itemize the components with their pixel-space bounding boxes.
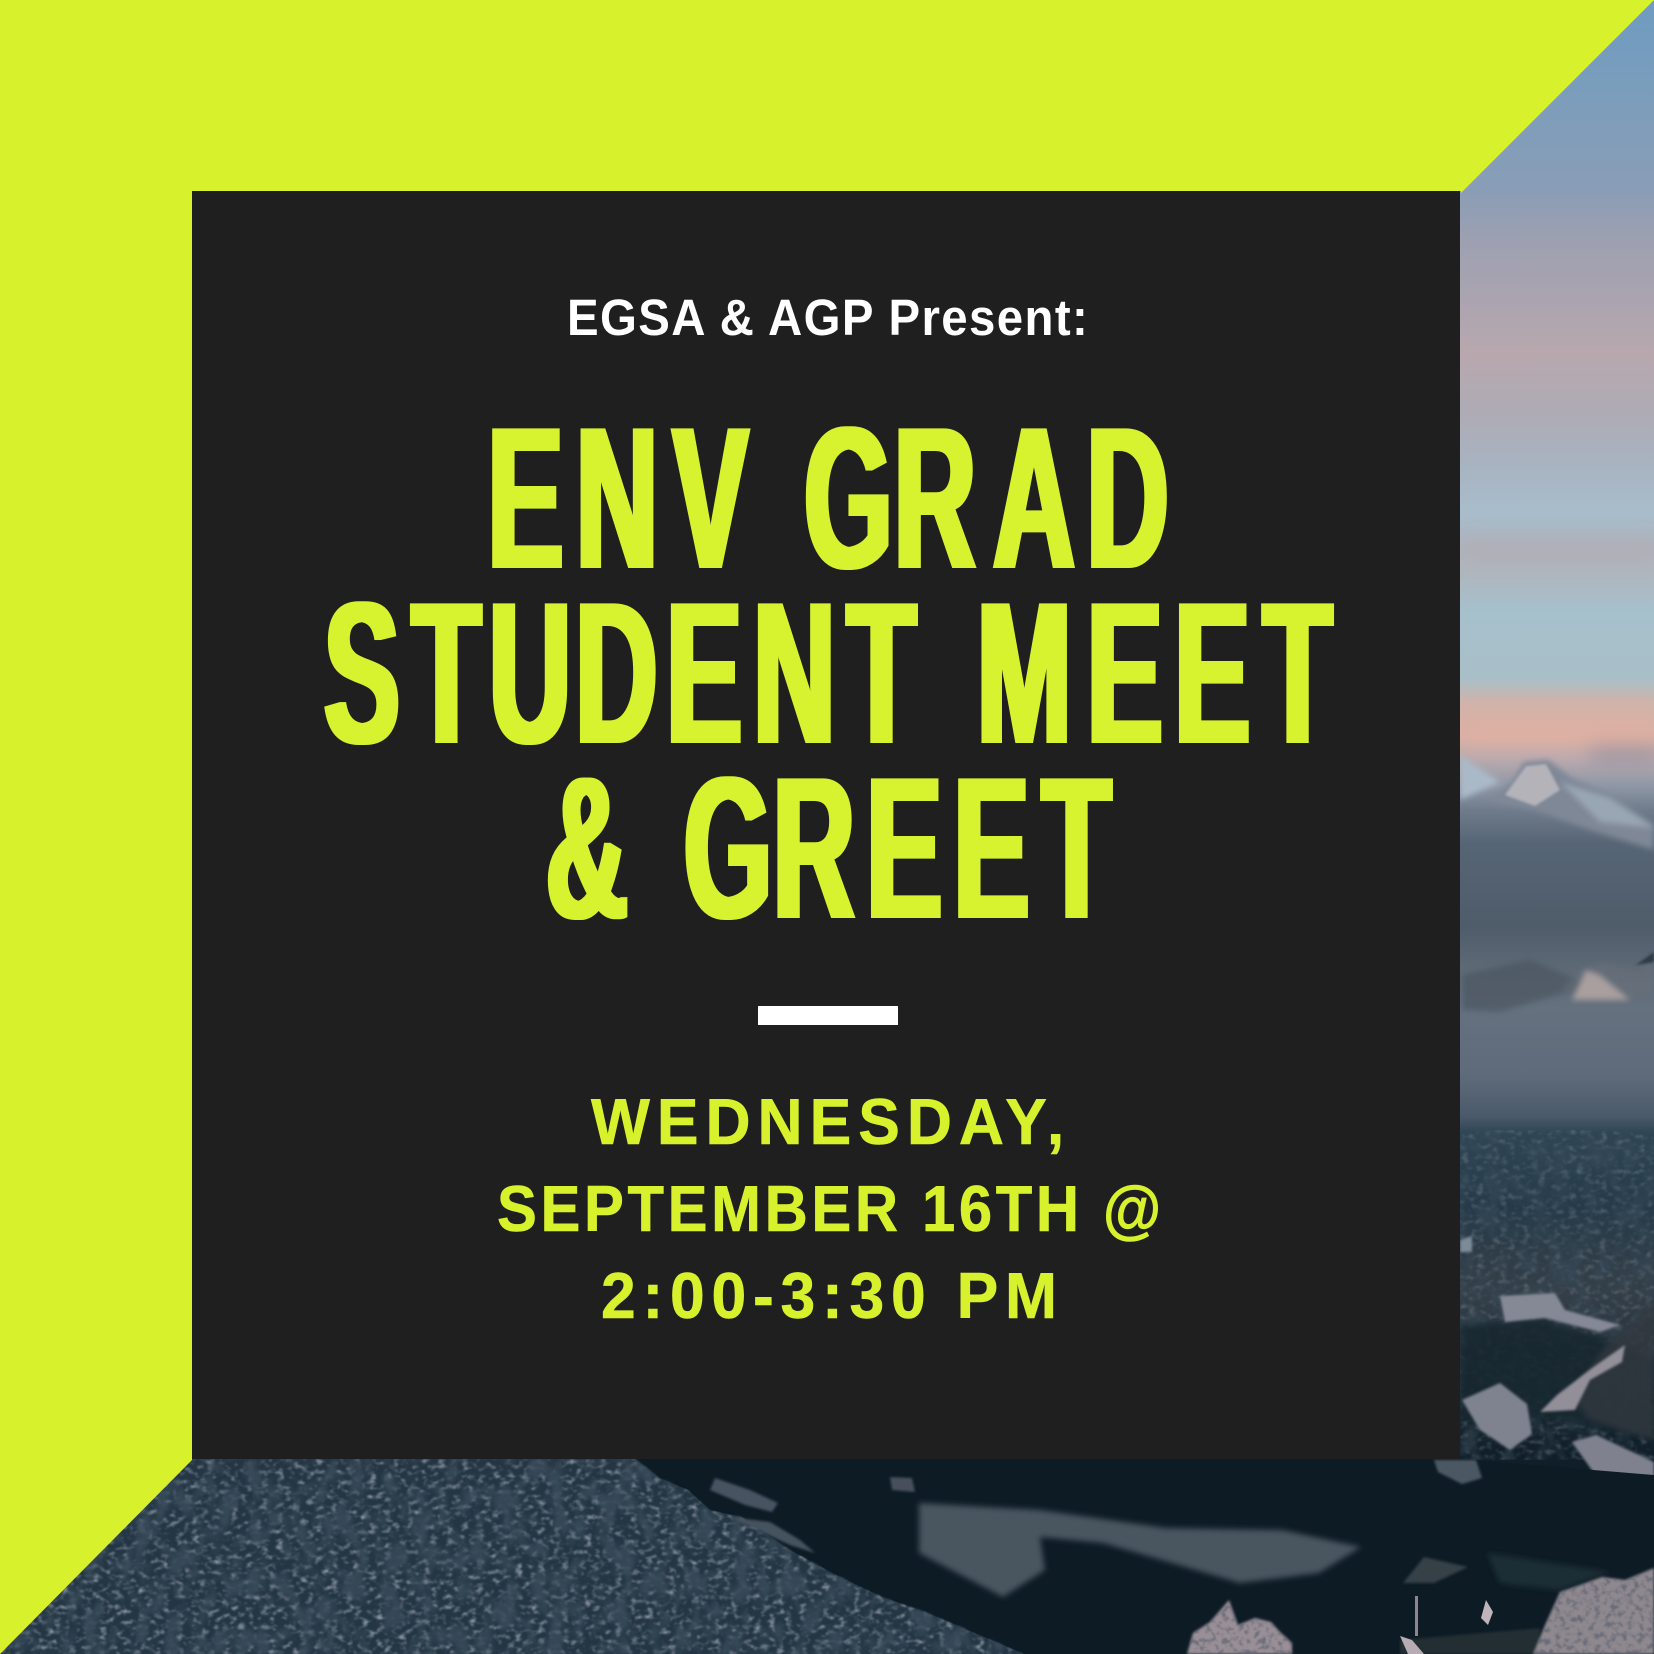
main title: [324, 384, 1332, 961]
dusk cloud streaks: [1460, 545, 1654, 760]
date and time: 2:00-3:30 PM: [601, 1259, 1057, 1332]
main title: STUDENT MEET: [324, 559, 1332, 786]
snowy fields, valley floor: [710, 1460, 1610, 1654]
date and time: [497, 1085, 1161, 1332]
date and time: WEDNESDAY,: [591, 1085, 1064, 1158]
dark valley floor: [600, 1459, 1654, 1654]
dark central panel: [192, 191, 1460, 1459]
date and time: SEPTEMBER 16TH @: [497, 1173, 1161, 1246]
valley forest and snowy fields, right side: [1460, 1130, 1654, 1478]
snow-covered trees, foreground: [1187, 1568, 1654, 1654]
forested hillside, lower left: [0, 1459, 1024, 1654]
presenter line: EGSA & AGP Present:: [567, 289, 1088, 346]
distant snowy peaks: [1460, 755, 1654, 850]
cloud bank and cliffs: [1462, 952, 1654, 1012]
main title: ENV GRAD: [488, 384, 1169, 611]
white divider bar: [758, 1006, 898, 1025]
main title: & GREET: [546, 734, 1111, 961]
